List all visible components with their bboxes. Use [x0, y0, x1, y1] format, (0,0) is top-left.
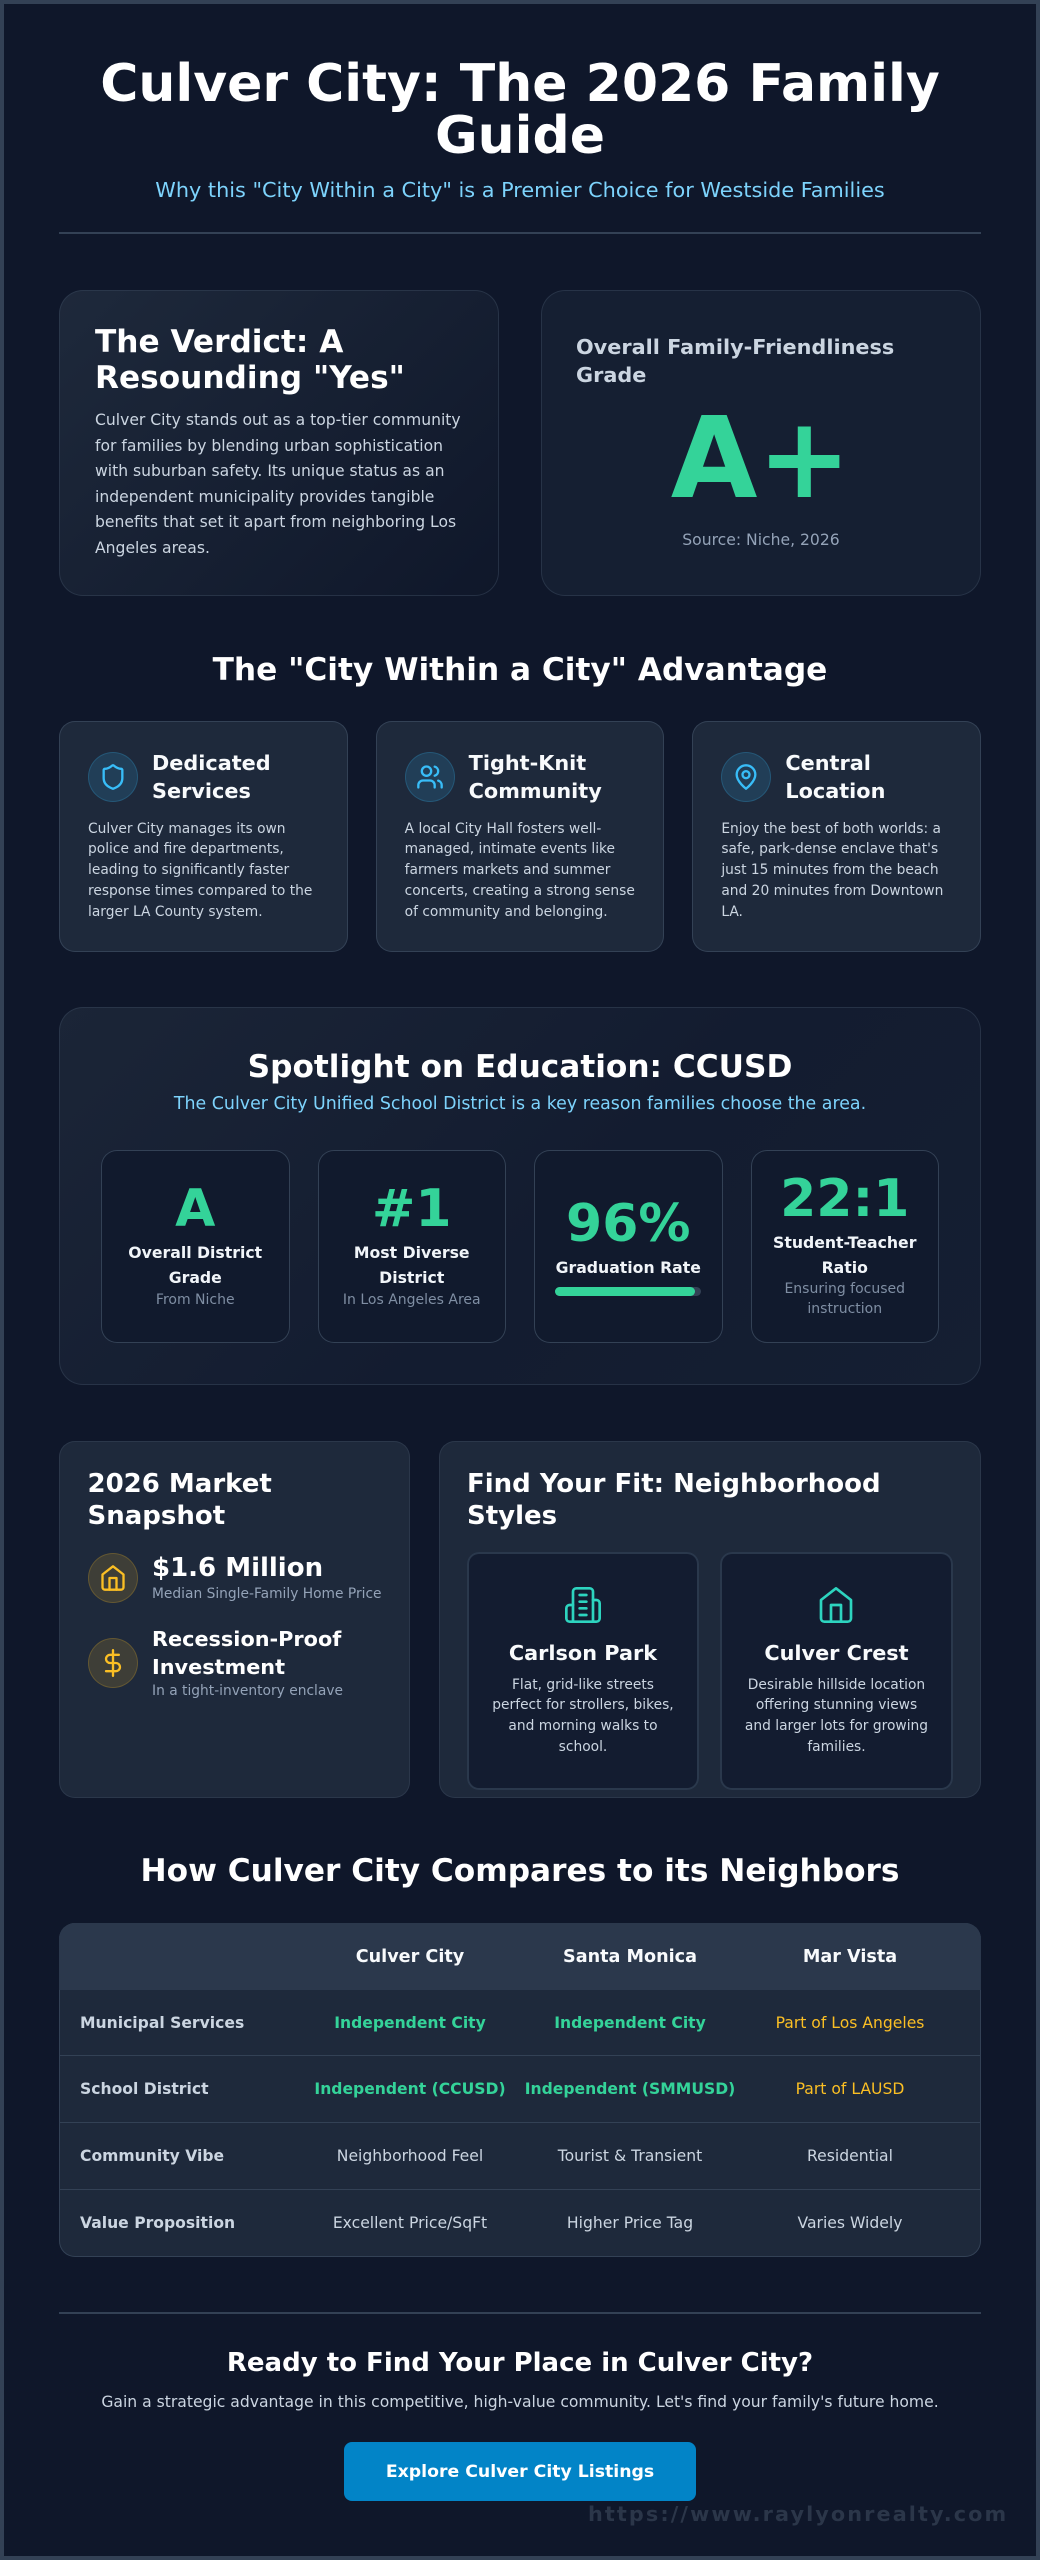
row: school district: Part of LAUSD [796, 2080, 904, 2098]
market heading: 2026 Market [88, 1469, 272, 1499]
card text: managed, intimate events like [405, 841, 615, 857]
row: community vibe [59, 2123, 981, 2190]
panel: verdict [59, 290, 499, 596]
market heading: Snapshot [88, 1501, 225, 1531]
verdict text: Culver City stands out as a top-tier community [95, 411, 461, 429]
icon: map pin [721, 752, 771, 802]
verdict text: independent municipality provides tangible [95, 488, 434, 506]
card text: safe, park-dense enclave that's [721, 841, 938, 857]
footer heading: Ready to Find Your Place in Culver City? [227, 2348, 813, 2378]
grade label: Overall Family-Friendliness [576, 335, 894, 359]
row: value proposition: Higher Price Tag [567, 2214, 693, 2232]
stat label [354, 1243, 470, 1286]
stat label: Grade [169, 1268, 222, 1286]
stat value: #1 [372, 1178, 452, 1238]
neighborhood text: Flat, grid-like streets [512, 1677, 654, 1693]
neighborhoods heading [467, 1469, 881, 1531]
row: value proposition [80, 2214, 902, 2232]
stat label [128, 1243, 262, 1286]
icon: users [405, 752, 455, 802]
stat value: A [175, 1178, 215, 1238]
stat: graduation rate [534, 1150, 722, 1343]
card text [721, 821, 943, 920]
neighborhood text: and larger lots for growing [745, 1718, 928, 1734]
card text: response times compared to the [88, 883, 312, 899]
card text [404, 821, 635, 920]
neighborhood text: Desirable hillside location [748, 1677, 925, 1693]
stat label: Student-Teacher [773, 1233, 916, 1252]
row: value proposition: Varies Widely [798, 2214, 902, 2232]
row: school district: Independent (CCUSD) [314, 2080, 506, 2098]
stat note [784, 1280, 905, 1317]
table header [59, 1923, 981, 1990]
panel: tight-knit community [376, 721, 664, 952]
price label: Median Single-Family Home Price [152, 1586, 382, 1602]
row: municipal services: Independent City [554, 2014, 706, 2032]
grade label [576, 335, 894, 387]
card title: Dedicated [152, 751, 271, 775]
grade source: Source: Niche, 2026 [682, 531, 840, 549]
row: community vibe: Tourist & Transient [558, 2147, 702, 2165]
verdict text: with suburban safety. Its unique status as an [95, 462, 445, 480]
verdict heading [95, 324, 405, 396]
panel: overall grade [541, 290, 981, 596]
card text: farmers markets and summer [405, 862, 610, 878]
stat label: Most Diverse [354, 1243, 470, 1262]
stat label: Ratio [822, 1258, 868, 1276]
row: value proposition: Value Proposition [80, 2214, 235, 2232]
education heading: Spotlight on Education: CCUSD [248, 1049, 792, 1085]
neighborhood text: offering stunning views [756, 1697, 917, 1713]
grade label: Grade [576, 363, 646, 387]
table header: Culver City [356, 1947, 464, 1967]
card text: Culver City manages its own [88, 821, 286, 837]
stat note: Ensuring focused [784, 1280, 905, 1296]
stat value: 22:1 [780, 1168, 909, 1228]
panel: dedicated services [59, 721, 348, 952]
title: Guide [435, 106, 605, 166]
verdict heading: Resounding "Yes" [95, 360, 405, 396]
card text: and 20 minutes from Downtown [721, 883, 943, 899]
row: school district: Independent (SMMUSD) [525, 2080, 735, 2098]
verdict text: Angeles areas. [95, 538, 210, 556]
panel: neighborhoods [439, 1441, 981, 1798]
card text: just 15 minutes from the beach [721, 862, 939, 878]
stat: student-teacher ratio [750, 1150, 939, 1343]
investment label: In a tight-inventory enclave [152, 1683, 343, 1699]
card title [468, 751, 602, 803]
verdict text: for families by blending urban sophistication [95, 436, 443, 454]
row: community vibe: Neighborhood Feel [337, 2147, 483, 2165]
education subheading: The Culver City Unified School District is a key reason families choose the area. [174, 1094, 866, 1114]
row: municipal services: Municipal Services [80, 2014, 244, 2032]
card text: A local City Hall fosters well- [405, 821, 601, 837]
neighborhoods heading: Styles [467, 1501, 557, 1531]
stat label: Graduation Rate [556, 1258, 701, 1277]
card text: Enjoy the best of both worlds: a [721, 821, 941, 837]
table header: Santa Monica [563, 1947, 697, 1967]
card title: Central [785, 751, 871, 775]
stat: district grade [101, 1150, 290, 1343]
icon: dollar [88, 1638, 138, 1688]
icon: shield [88, 752, 138, 802]
neighborhood name: Carlson Park [509, 1641, 657, 1665]
icon: building [565, 1587, 601, 1623]
title: Culver City: The 2026 Family [100, 54, 940, 114]
stat label [773, 1233, 916, 1276]
row: value proposition: Excellent Price/SqFt [333, 2214, 487, 2232]
card title: Tight-Knit [469, 751, 586, 775]
comparison table [59, 1923, 981, 2257]
stat label: District [379, 1268, 444, 1286]
heading: advantage: The "City Within a City" Advantage [213, 652, 827, 688]
card text: leading to significantly faster [88, 862, 289, 878]
icon: home [88, 1553, 138, 1603]
card text: of community and belonging. [405, 904, 608, 920]
neighborhood text [745, 1677, 928, 1755]
card text: concerts, creating a strong sense [405, 883, 635, 899]
verdict text: benefits that set it apart from neighboring Los [95, 513, 456, 531]
card title: Location [785, 779, 885, 803]
verdict heading: The Verdict: A [95, 324, 343, 360]
card text: police and fire departments, [88, 841, 284, 857]
row: school district: School District [80, 2080, 209, 2098]
row: school district [59, 2056, 981, 2123]
panel: education spotlight [59, 1007, 981, 1385]
watermark: https://www.raylyonrealty.com [588, 2502, 1008, 2526]
panel: central location [692, 721, 981, 952]
neighborhood text: families. [807, 1739, 866, 1755]
footer text: Gain a strategic advantage in this competitive, high-value community. Let's find your family's future home. [101, 2393, 939, 2411]
row: community vibe: Community Vibe [80, 2147, 224, 2165]
neighborhoods heading: Find Your Fit: Neighborhood [467, 1469, 881, 1499]
card title: Community [469, 779, 602, 803]
neighborhood text [492, 1677, 674, 1755]
button [344, 2442, 696, 2501]
stat note: instruction [807, 1301, 882, 1317]
subtitle: Why this "City Within a City" is a Premier Choice for Westside Families [155, 178, 885, 202]
card text [88, 821, 312, 920]
verdict text [95, 411, 461, 556]
grade value: A+ [671, 394, 851, 524]
card title [785, 751, 885, 803]
market heading [88, 1469, 272, 1531]
button: Explore Culver City Listings [386, 2462, 654, 2482]
stat value: 96% [566, 1194, 690, 1254]
neighborhood text: perfect for strollers, bikes, [492, 1697, 674, 1713]
investment value: Investment [152, 1654, 285, 1678]
stat note: In Los Angeles Area [343, 1292, 481, 1308]
investment value: Recession-Proof [152, 1626, 341, 1650]
heading: comparison: How Culver City Compares to its Neighbors [141, 1853, 899, 1889]
table header: Mar Vista [803, 1947, 897, 1967]
neighborhood text: school. [559, 1739, 607, 1755]
price value: $1.6 Million [152, 1553, 323, 1583]
investment value [152, 1626, 342, 1678]
neighborhood: Culver Crest [720, 1552, 953, 1790]
row: municipal services: Part of Los Angeles [776, 2014, 924, 2032]
stat: diversity [318, 1150, 506, 1343]
row: community vibe: Residential [807, 2147, 893, 2165]
neighborhood text: and morning walks to [508, 1718, 658, 1734]
stat label: Overall District [128, 1243, 262, 1262]
card text: LA. [721, 904, 743, 920]
icon: house [820, 1587, 852, 1623]
panel: market snapshot [59, 1441, 410, 1798]
progress bar [555, 1287, 701, 1296]
row: municipal services: Independent City [334, 2014, 486, 2032]
card text: larger LA County system. [88, 904, 263, 920]
card title [152, 751, 271, 803]
card title: Services [152, 779, 251, 803]
neighborhood name: Culver Crest [764, 1641, 909, 1665]
row: municipal services [59, 1990, 981, 2056]
title [100, 54, 940, 166]
stat note: From Niche [156, 1292, 235, 1308]
neighborhood: Carlson Park [467, 1552, 699, 1790]
